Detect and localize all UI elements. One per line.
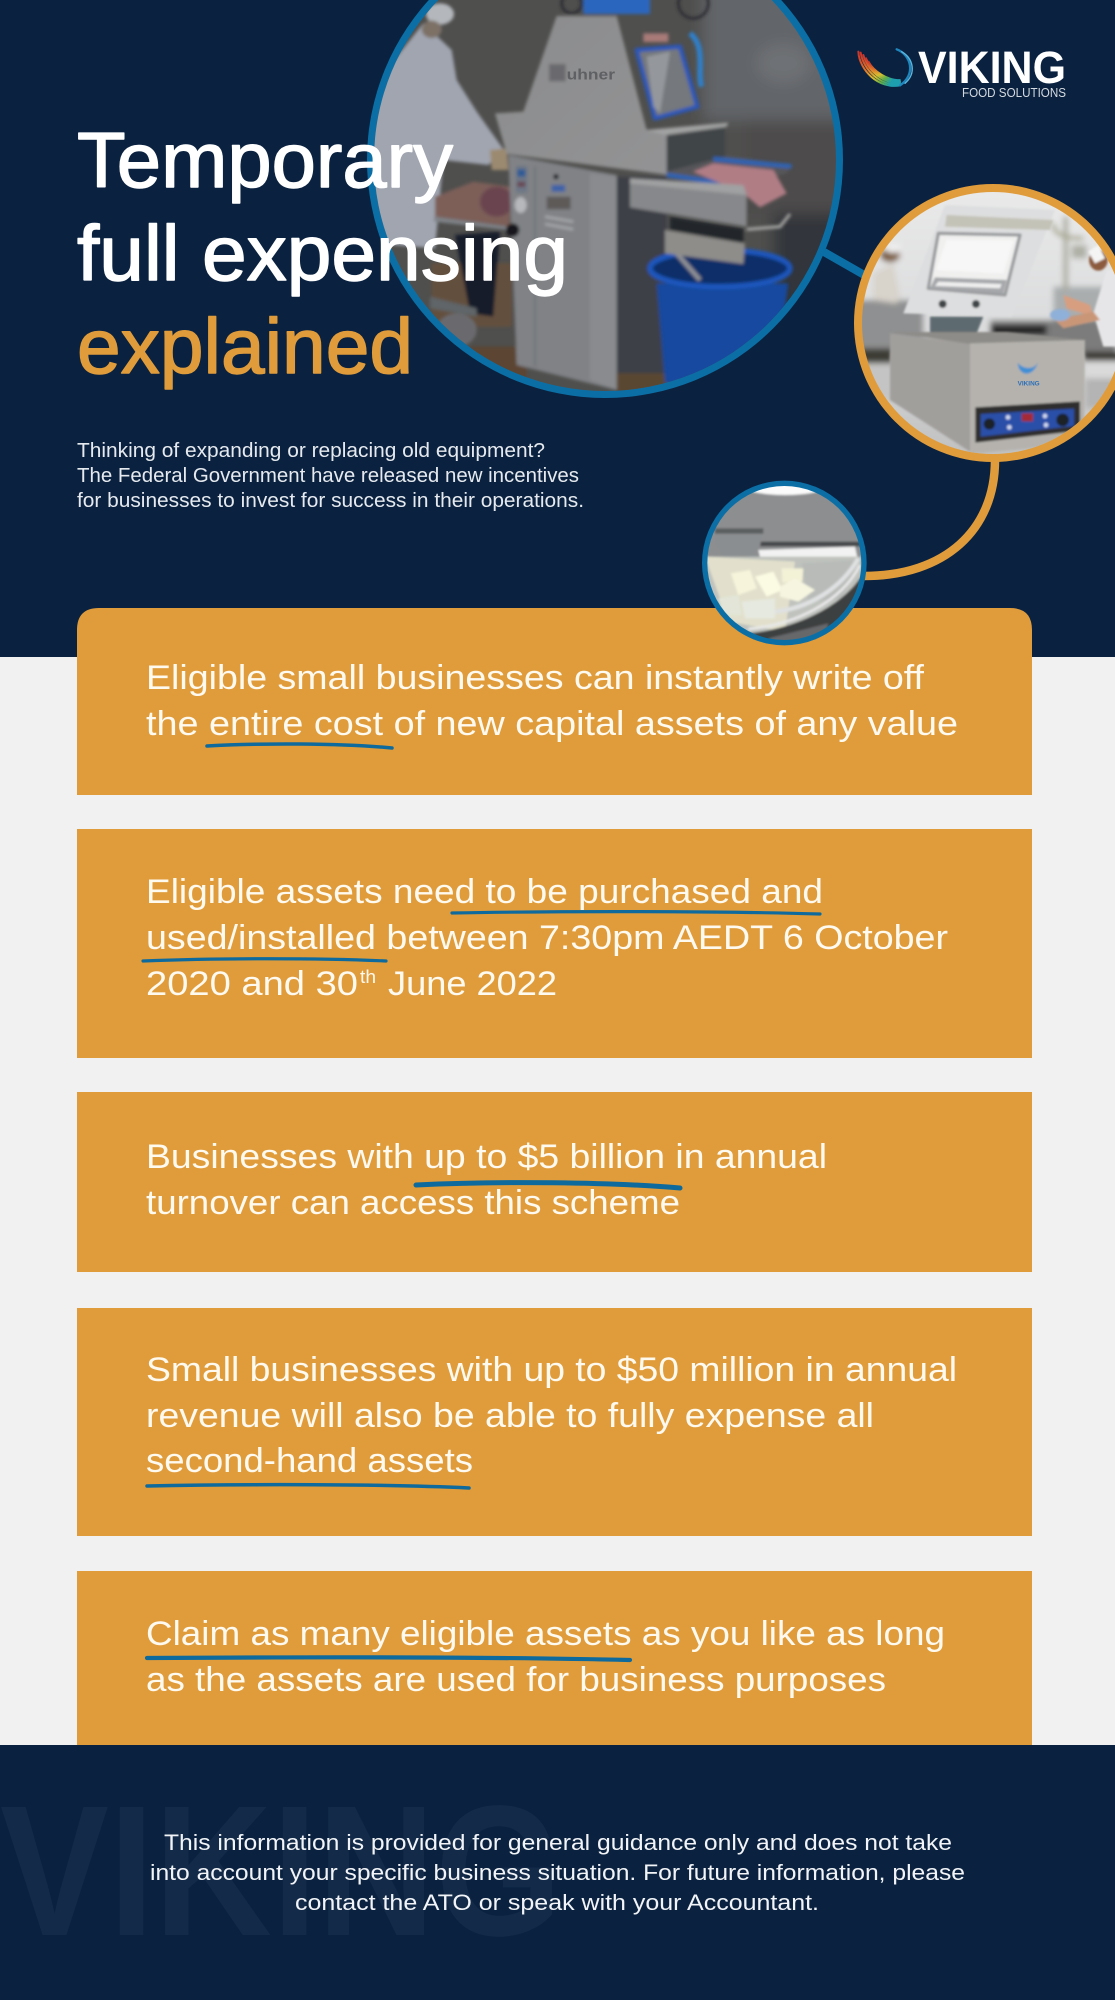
footer disclaimer: into account your specific business situation. For future information, please — [150, 1860, 965, 1885]
intro text — [77, 440, 584, 512]
card 3 text: Businesses with up to $5 billion in annual — [146, 1138, 827, 1176]
title: explained — [77, 302, 413, 390]
panel: card 1 — [77, 608, 1032, 795]
card 2 text: th — [360, 967, 376, 987]
left chef — [873, 263, 900, 303]
logo icon: swoosh — [858, 49, 912, 86]
connector: orange photo to small photo — [864, 460, 995, 576]
underline: up to $5 billion — [416, 1183, 680, 1188]
machine logo swoosh — [1018, 362, 1038, 374]
panel: card 3 — [77, 1092, 1032, 1272]
underline: to be purchased and — [452, 912, 820, 914]
card 2 text — [146, 873, 948, 1003]
card 2 text: June 2022 — [388, 965, 557, 1003]
photo circle: injector machine — [367, 0, 843, 398]
panel: card 2 — [77, 829, 1032, 1058]
intro text: The Federal Government have released new incentives — [77, 465, 579, 487]
card 2 text: used/installed between 7:30pm AEDT 6 October — [146, 919, 948, 957]
logo tagline: FOOD SOLUTIONS — [962, 86, 1066, 100]
control panel — [975, 401, 1080, 443]
blue bucket — [657, 283, 788, 390]
footer background — [0, 1745, 1115, 2000]
underline: Claim as many eligible assets — [147, 1657, 630, 1660]
outlet chamber — [645, 123, 728, 135]
top hose and rings — [583, 0, 650, 14]
card 4 text: Small businesses with up to $50 million in annual — [146, 1351, 957, 1389]
title — [77, 116, 568, 390]
footer disclaimer: This information is provided for general guidance only and does not take — [164, 1830, 952, 1855]
base — [508, 155, 617, 390]
bowl shadow — [751, 576, 860, 639]
card 3 text — [146, 1138, 827, 1222]
blurred backdrop — [374, 0, 836, 391]
machine lid glass — [903, 205, 1055, 317]
tray and meat — [667, 156, 792, 185]
card 4 text: revenue will also be able to fully expense all — [146, 1397, 874, 1435]
header background — [0, 0, 1115, 657]
title: full expensing — [77, 209, 568, 297]
underline: entire cost — [207, 744, 392, 748]
footer watermark: VIKING — [0, 1768, 562, 1975]
underline: used/installed — [143, 959, 386, 961]
panel: card 5 — [77, 1571, 1032, 1745]
card 5 text — [146, 1615, 945, 1699]
machine body — [890, 333, 970, 452]
card 3 text: turnover can access this scheme — [146, 1184, 680, 1222]
underline: second-hand assets — [147, 1485, 469, 1488]
card 4 text — [146, 1351, 957, 1480]
window — [637, 47, 697, 118]
card 2 text: Eligible assets need to be purchased and — [146, 873, 823, 911]
man — [360, 23, 504, 248]
logo wordmark: VIKING — [918, 42, 1066, 93]
upper housing — [495, 16, 668, 175]
card 5 text: Claim as many eligible assets as you like as long — [146, 1615, 945, 1653]
panel: card 4 — [77, 1308, 1032, 1536]
logo — [858, 42, 1066, 100]
title: Temporary — [77, 116, 453, 204]
left trolley and legs — [432, 263, 512, 327]
machine brand label: uhner — [567, 67, 615, 83]
connector: big photo to orange photo — [824, 252, 866, 276]
card 1 text — [146, 659, 958, 743]
machine logo text: VIKING — [1018, 382, 1040, 388]
card 5 text: as the assets are used for business purposes — [146, 1661, 886, 1699]
card 2 text: 2020 and 30 — [146, 965, 358, 1003]
shelf — [630, 180, 747, 227]
cheese cubes — [731, 570, 757, 595]
footer disclaimer — [150, 1830, 965, 1915]
light page background — [0, 657, 1115, 1745]
card 1 text: Eligible small businesses can instantly write off — [146, 659, 924, 697]
card 4 text: second-hand assets — [146, 1442, 473, 1480]
kitchen background — [1050, 284, 1102, 324]
card 1 text: the entire cost of new capital assets of any value — [146, 705, 958, 743]
right chef — [1093, 270, 1115, 347]
dark gap and floor — [613, 177, 667, 390]
photo circle: vacuum sealer — [854, 184, 1115, 462]
intro text: Thinking of expanding or replacing old equipment? — [77, 440, 545, 462]
intro text: for businesses to invest for success in their operations. — [77, 490, 584, 512]
photo circle: food slicer bowl — [702, 480, 867, 646]
footer disclaimer: contact the ATO or speak with your Accountant. — [295, 1890, 819, 1915]
bowl rim — [775, 558, 858, 612]
